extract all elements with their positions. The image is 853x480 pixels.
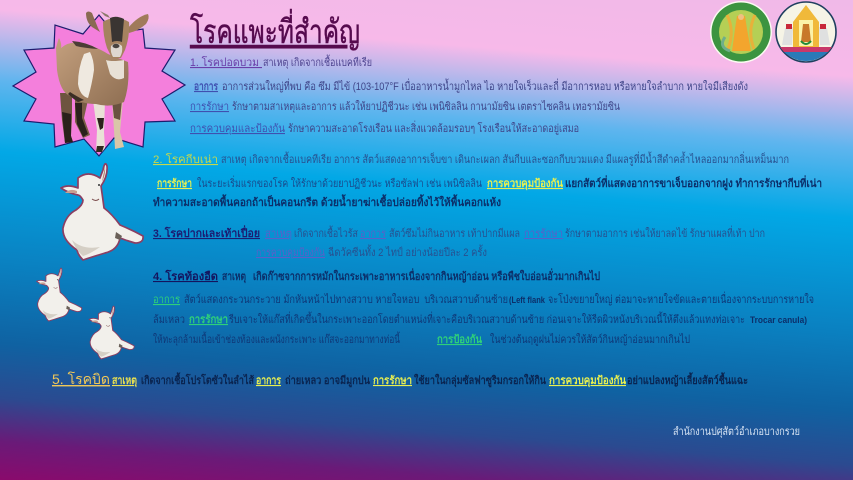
- disease 2: foot rot: [153, 151, 822, 209]
- disease 3: foot and mouth: เกิดจากเชื้อไวรัส: [294, 225, 358, 240]
- disease 2: foot rot: การควบคุมป้องกัน: [487, 177, 563, 191]
- disease 5: coccidiosis: 5. โรคบิด: [52, 371, 110, 387]
- disease 5: coccidiosis: การควบคุมป้องกัน: [549, 374, 626, 388]
- footer credit: สำนักงานปศุสัตว์อำเภอบางกรวย: [673, 425, 800, 438]
- disease 1: pneumonia: รักษาตามสาเหตุและอาการ แล้วให้ยาปฏิชีวนะ เช่น เพนิซิลลิน กานามัยซิน เตตราไซคลิน เทอรามัยซิน: [232, 100, 620, 113]
- disease 5: coccidiosis: อย่าแปลงหญ้าเลี้ยงสัตว์ชื้นแฉะ: [627, 372, 748, 387]
- disease 1: pneumonia: รักษาความสะอาดโรงเรือน และสิ่งแวดล้อมรอบๆ โรงเรือนให้สะอาดอยู่เสมอ: [288, 120, 579, 135]
- disease 3: foot and mouth: รักษาตามอาการ เช่นให้ยาลดไข้ รักษาแผลที่เท้า ปาก: [565, 225, 765, 240]
- disease 4: bloat: (Left flank: [509, 295, 546, 305]
- disease 3: foot and mouth: สาเหตุ: [265, 228, 292, 240]
- disease 5: coccidiosis: [52, 371, 748, 388]
- disease 2: foot rot: ทำความสะอาดพื้นคอกถ้าเป็นคอนกรีต ด้วยน้ำยาฆ่าเชื้อปล่อยทิ้งไว้ให้พื้นคอกแห้ง: [153, 194, 501, 209]
- logo: ministry of agriculture: [710, 1, 772, 63]
- disease 3: foot and mouth: ฉีดวัคซีนทั้ง 2 ไทป์ อย่างน้อยปีละ 2 ครั้ง: [328, 244, 487, 259]
- disease 2: foot rot: การรักษา: [157, 177, 192, 190]
- icon: small white goat right: [89, 306, 134, 359]
- disease 4: bloat: [153, 268, 814, 346]
- disease 1: pneumonia: 1. โรคปอดบวม: [190, 55, 262, 69]
- disease 4: bloat: เกิดก๊าซจากการหมักในกระเพาะอาหารเนื่องจากกินหญ้าอ่อน หรือพืชใบอ่อนอั่วมากเกินไป: [253, 268, 600, 283]
- disease 4: bloat: Trocar canula): [750, 315, 807, 325]
- disease 2: foot rot: แยกสัตว์ที่แสดงอาการขาเจ็บออกจากฝูง ทำการรักษากีบที่เน่า: [565, 175, 822, 191]
- icon: large white goat: [61, 164, 143, 260]
- disease 4: bloat: ในช่วงต้นฤดูฝนไม่ควรให้สัตว์กินหญ้าอ่อนมากเกินไป: [490, 333, 690, 346]
- disease 1: pneumonia: อาการ: [194, 81, 218, 93]
- disease 5: coccidiosis: สาเหตุ: [112, 375, 137, 388]
- disease 3: foot and mouth: สัตว์ซึมไม่กินอาหาร เท้าปากมีแผล: [389, 227, 520, 240]
- disease 4: bloat: ให้ทะลุกล้ามเนื้อเข้าช่องท้องและผนังกระเพาะ แก๊สจะออกมาทางท่อนี้: [153, 331, 400, 346]
- icon: small white goat left: [37, 268, 82, 321]
- disease 3: foot and mouth: [153, 225, 765, 259]
- disease 4: bloat: ล้มเหลว: [153, 314, 185, 326]
- logo: livestock department: [776, 2, 836, 62]
- disease 5: coccidiosis: ใช้ยาในกลุ่มซัลฟาซูริมกรอกให้กิน: [414, 373, 546, 388]
- disease 5: coccidiosis: เกิดจากเชื้อโปรโตซัวในลำไส้: [141, 372, 254, 387]
- disease 4: bloat: สาเหตุ: [222, 271, 246, 284]
- disease 1: pneumonia: สาเหตุ เกิดจากเชื้อแบคทีเรีย: [263, 54, 372, 69]
- icon: brown goat: [56, 11, 149, 152]
- disease 1: pneumonia: อาการส่วนใหญ่ที่พบ คือ ซึม มีไข้ (103-107°F เบื่ออาหารน้ำมูกไหล ไอ หายใจเร็วและถี่ มีอาการหอบ หรือหายใจลำบาก หายใจมีเสียงดัง: [222, 78, 748, 93]
- disease 3: foot and mouth: การรักษา: [524, 228, 563, 240]
- disease 1: pneumonia: การรักษา: [190, 101, 229, 113]
- disease 5: coccidiosis: การรักษา: [373, 374, 412, 387]
- disease 4: bloat: รีบเจาะให้แก๊สที่เกิดขึ้นในกระเพาะออกโดยตำแหน่งที่เจาะคือบริเวณสวาบด้านซ้าย ก่อนเจาะให้รีดผิวหนังบริเวณนี้ให้ตึงแล้วแทงท่อเจาะ: [228, 311, 745, 326]
- disease 2: foot rot: 2. โรคกีบเน่า: [153, 152, 218, 166]
- title: โรคแพะที่สำคัญ: [190, 9, 360, 50]
- pink star burst: [13, 15, 185, 156]
- disease 5: coccidiosis: อาการ: [256, 375, 281, 387]
- disease 3: foot and mouth: การควบคุมป้องกัน: [256, 247, 325, 259]
- disease 3: foot and mouth: 3. โรคปากและเท้าเปื่อย: [153, 225, 260, 240]
- disease 1: pneumonia: การควบคุมและป้องกัน: [190, 123, 285, 135]
- disease 1: pneumonia: [190, 54, 748, 135]
- disease 2: foot rot: ในระยะเริ่มแรกของโรค ให้รักษาด้วยยาปฏิชีวนะ หรือซัลฟา เช่น เพนิซิลลิน: [197, 175, 482, 190]
- disease 4: bloat: สัตว์แสดงกระวนกระวาย มักหันหน้าไปทางสวาบ หายใจหอบ บริเวณสวาบด้านซ้าย: [184, 293, 508, 306]
- disease 4: bloat: อาการ: [153, 294, 180, 306]
- disease 3: foot and mouth: อาการ: [360, 228, 386, 240]
- disease 4: bloat: 4. โรคท้องอืด: [153, 269, 218, 283]
- disease 4: bloat: การป้องกัน: [437, 333, 482, 346]
- disease 5: coccidiosis: ถ่ายเหลว อาจมีมูกปน: [285, 374, 370, 388]
- disease 4: bloat: การรักษา: [189, 313, 228, 326]
